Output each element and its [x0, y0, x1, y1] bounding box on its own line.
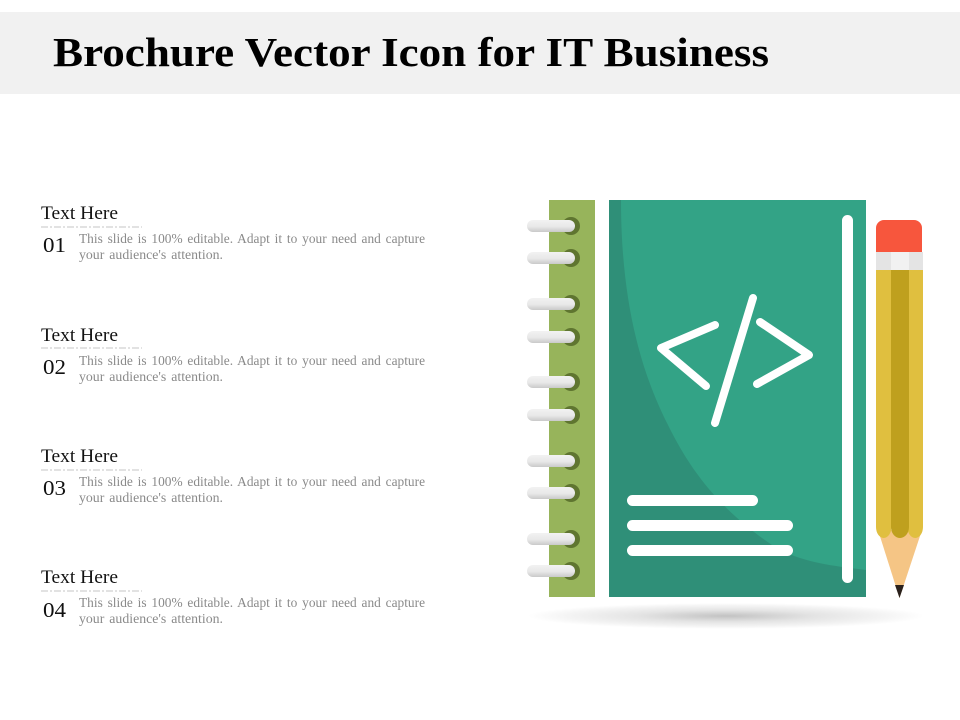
- list item 02: 02: [43, 355, 66, 379]
- icon: brochure cover: [609, 200, 866, 597]
- list item 01: 01: [43, 233, 66, 257]
- list item 01: [41, 204, 425, 262]
- list item 02: [41, 326, 425, 384]
- ground shadow: [528, 603, 924, 629]
- icon: spiral binding strip: [527, 200, 595, 597]
- list item 03: your audience's attention.: [79, 490, 223, 505]
- list item 02: your audience's attention.: [79, 369, 223, 384]
- list item 04: This slide is 100% editable. Adapt it to your need and capture: [79, 595, 425, 610]
- list item 03: This slide is 100% editable. Adapt it to your need and capture: [79, 474, 425, 489]
- cover text lines: [627, 495, 793, 556]
- cover vertical bar: [842, 215, 853, 583]
- list item 03: Text Here: [41, 447, 118, 467]
- icon: code symbol: [661, 298, 809, 423]
- list item 03: [41, 447, 425, 505]
- list item 01: This slide is 100% editable. Adapt it to your need and capture: [79, 231, 425, 246]
- list item 01: your audience's attention.: [79, 247, 223, 262]
- list item 04: 04: [43, 598, 67, 622]
- list item 04: Text Here: [41, 568, 118, 588]
- list item 02: Text Here: [41, 326, 118, 346]
- list item 01: Text Here: [41, 204, 118, 224]
- list item 03: 03: [43, 476, 66, 500]
- icon: pencil: [876, 220, 923, 598]
- list item 02: This slide is 100% editable. Adapt it to your need and capture: [79, 353, 425, 368]
- list item 04: your audience's attention.: [79, 611, 223, 626]
- title banner: [0, 12, 960, 94]
- list item 04: [41, 568, 425, 626]
- title: Brochure Vector Icon for IT Business: [53, 29, 769, 75]
